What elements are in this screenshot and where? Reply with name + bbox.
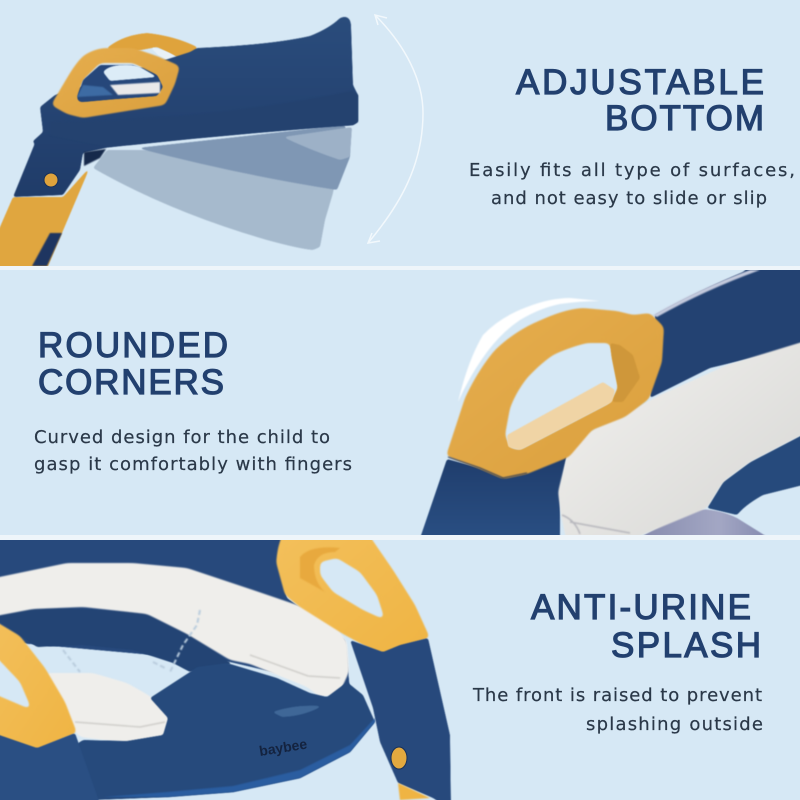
arrow: tilt range bbox=[368, 15, 423, 243]
hinge bbox=[84, 149, 106, 166]
cushion bbox=[558, 338, 800, 548]
yellow leg bbox=[0, 170, 88, 266]
heading: anti-urine splash: SPLASH bbox=[611, 626, 761, 665]
cushion wrinkle bbox=[562, 515, 630, 534]
back yellow handle bbox=[108, 32, 197, 57]
heading: anti-urine splash bbox=[531, 588, 761, 665]
navy back of seat bbox=[0, 540, 350, 686]
handle inner rib bbox=[507, 382, 615, 450]
navy seat body bbox=[13, 17, 358, 197]
heading: adjustable bottom bbox=[516, 63, 764, 138]
panel: anti-urine splash bbox=[0, 525, 800, 800]
back handle opening bbox=[152, 47, 176, 59]
seat rim highlight bbox=[108, 93, 359, 148]
heading: anti-urine splash: ANTI-URINE bbox=[531, 588, 751, 627]
grey underside bbox=[643, 509, 765, 535]
left navy post bbox=[0, 730, 104, 800]
front yellow handle bbox=[51, 48, 180, 118]
right pivot dot bbox=[391, 747, 407, 769]
guard lighter rim bbox=[103, 718, 375, 797]
description bbox=[469, 160, 795, 209]
raised front guard bbox=[75, 663, 375, 800]
water splash bbox=[63, 610, 200, 672]
lower navy seat rim bbox=[707, 428, 800, 515]
handle dark seam bbox=[448, 457, 527, 478]
right handle inner shade bbox=[300, 547, 340, 592]
illustration: rounded handle bbox=[416, 258, 800, 550]
heading: adjustable bottom: ADJUSTABLE bbox=[516, 63, 764, 102]
guard highlight bbox=[272, 706, 322, 717]
heading: rounded corners: CORNERS bbox=[38, 363, 224, 402]
back cushion bbox=[0, 563, 349, 697]
description: The front is raised to prevent bbox=[472, 685, 762, 706]
description: Easily fits all type of surfaces, bbox=[469, 160, 795, 181]
left yellow handle bbox=[0, 615, 77, 750]
navy back rail bbox=[650, 258, 800, 398]
swoosh bbox=[458, 298, 600, 402]
lilac back edge bbox=[653, 270, 760, 317]
pivot dot bbox=[44, 173, 58, 187]
illustration: seat tilting positions bbox=[0, 17, 358, 285]
front cushion bbox=[44, 673, 170, 743]
logo: baybee: baybee bbox=[258, 736, 308, 759]
panel: adjustable bottom bbox=[0, 0, 800, 285]
right yellow leg stub bbox=[398, 783, 430, 800]
description bbox=[34, 427, 352, 475]
description: Curved design for the child to bbox=[34, 427, 330, 448]
back cushion seam bbox=[250, 655, 340, 678]
description bbox=[472, 685, 763, 735]
inner ring bbox=[0, 607, 232, 672]
navy lower handle base bbox=[420, 457, 567, 535]
panel: rounded corners bbox=[0, 258, 800, 550]
arrowheads bbox=[368, 15, 387, 243]
description: and not easy to slide or slip bbox=[491, 188, 767, 209]
heading: rounded corners: ROUNDED bbox=[38, 326, 228, 365]
dark leg insert bbox=[32, 233, 62, 266]
description: gasp it comfortably with fingers bbox=[34, 454, 352, 475]
right yellow handle bbox=[275, 540, 430, 652]
faded seat positions bbox=[93, 125, 352, 250]
yellow handle bbox=[446, 308, 664, 479]
description: splashing outside bbox=[586, 714, 763, 735]
handle inner shade bbox=[610, 343, 640, 402]
heading: adjustable bottom: BOTTOM bbox=[605, 99, 764, 138]
front cushion seam bbox=[75, 722, 165, 727]
right navy post bbox=[350, 638, 451, 800]
heading: rounded corners bbox=[38, 326, 228, 402]
illustration: seat with raised front bbox=[0, 525, 451, 800]
handle opening detail bbox=[77, 65, 163, 102]
